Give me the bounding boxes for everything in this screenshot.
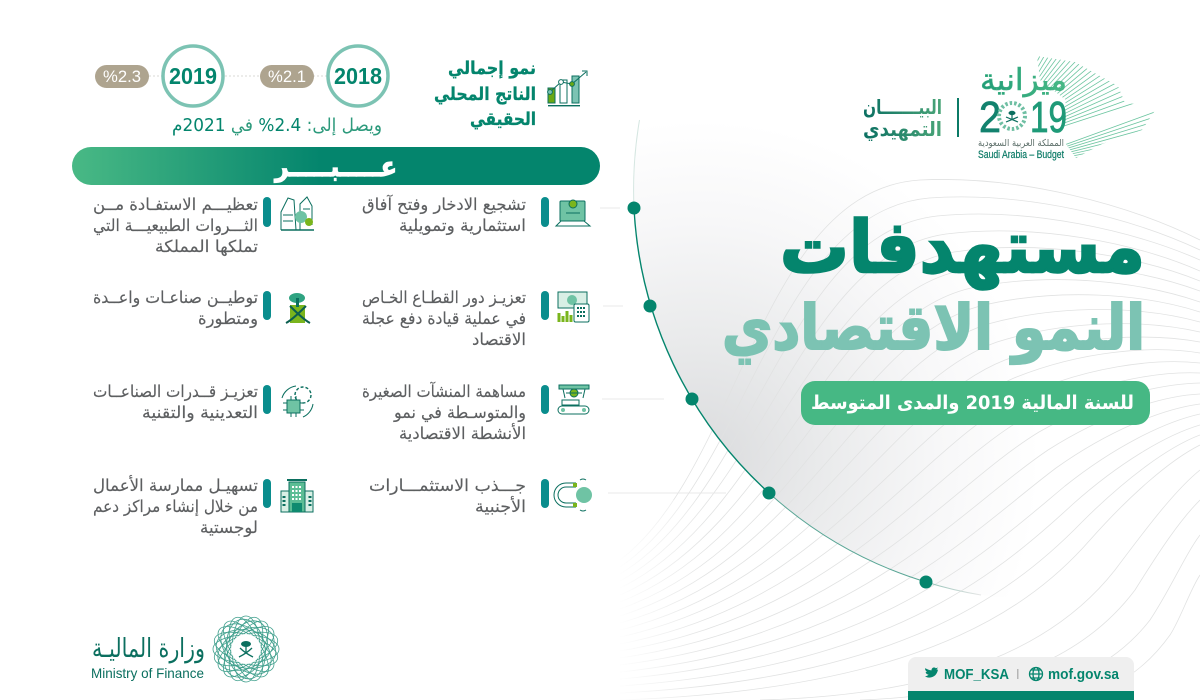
item: business environment: لوجستية (200, 518, 258, 538)
GDP growth heading: الناتج المحلي (434, 84, 536, 105)
emblem star (999, 103, 1025, 129)
timeline arc (628, 120, 981, 595)
banner: via: عـــــبـــــر (273, 152, 397, 183)
item: private sector: في عملية قيادة دفع عجلة (362, 309, 526, 329)
stat: 2019 (95, 46, 223, 106)
item text: تعظيـــم الاستفـادة مــن (93, 195, 258, 214)
icon: factory conveyor (558, 385, 589, 414)
icon: growth bar chart (548, 71, 587, 106)
item: private sector: الاقتصاد (472, 330, 526, 349)
banner: via (72, 147, 600, 185)
timeline dot 1 (628, 202, 640, 214)
budget english label: Saudi Arabia – Budget (978, 149, 1064, 161)
subtitle pill (801, 381, 1150, 425)
background disc (634, 0, 1200, 600)
item text: تعزيـز دور القطـاع الخـاص (362, 288, 526, 308)
item bar (541, 291, 549, 320)
ministry English name: Ministry of Finance (91, 665, 204, 681)
logo: budget 2019 (978, 56, 1154, 161)
item: business environment (93, 475, 313, 538)
GDP growth heading: الحقيقي (470, 109, 536, 130)
title line 2: النمو الاقتصادي (722, 291, 1145, 364)
preliminary statement heading: البيـــــــان (863, 95, 942, 119)
preliminary statement heading: التمهيدي (863, 117, 942, 142)
item bar (263, 479, 271, 508)
stat: 2018: 2018 (334, 63, 382, 89)
item: localise industries: ومتطورة (198, 309, 258, 329)
icon: twitter bird (925, 668, 938, 678)
item: natural resources (93, 195, 314, 257)
2021 forecast note: ويصل إلى: 2.4% في 2021م (172, 115, 382, 136)
icon: money and calculator (558, 292, 589, 322)
footer contact box (908, 657, 1134, 700)
item bar (541, 197, 549, 227)
GDP growth heading (434, 58, 536, 130)
item: natural resources: الثـــروات الطبيعيـــة التي (93, 216, 258, 236)
icon: gear and chip (282, 386, 313, 417)
ministry Arabic name: وزارة الماليـة (92, 634, 205, 664)
preliminary statement heading (863, 95, 942, 142)
item bar (263, 291, 271, 320)
title (722, 205, 1145, 364)
item text: تشجيع الادخار وفتح آفاق (362, 195, 526, 215)
twitter handle: MOF_KSA (944, 667, 1009, 683)
item bar (541, 385, 549, 414)
digit 2: 2 (979, 93, 1001, 142)
kingdom name: المملكة العربية السعودية (978, 138, 1064, 149)
item text: توطيــن صناعـات واعــدة (93, 288, 258, 308)
item: private sector (362, 288, 589, 349)
icon: palm and swords (286, 293, 310, 323)
item: savings (362, 195, 590, 236)
item: natural resources: تملكها المملكة (155, 237, 258, 257)
GDP growth heading: نمو إجمالي (448, 58, 536, 79)
map of Saudi Arabia stripes (1038, 56, 1154, 158)
pill: 2.3 percent (95, 65, 149, 88)
Ministry of Finance logo (91, 613, 282, 685)
digits 19: 19 (1030, 93, 1067, 142)
item: SMEs: الأنشطة الاقتصادية (399, 423, 526, 443)
item: localise industries (93, 288, 310, 329)
item bar (541, 479, 549, 508)
stat: 2018 (260, 46, 388, 106)
stat: 2018: %2.1 (268, 67, 306, 86)
stat: 2019: 2019 (169, 63, 217, 89)
icon: laptop savings (556, 200, 590, 226)
pill: 2.1 percent (260, 65, 314, 88)
item text: جـــذب الاستثمـــارات (369, 476, 526, 496)
website: mof.gov.sa (1048, 667, 1120, 683)
item: business environment: من خلال إنشاء مراكز دعم (93, 497, 258, 517)
item bar (263, 197, 271, 227)
budget word: ميزانية (980, 63, 1067, 98)
rosette emblem (210, 613, 282, 685)
item text: تعزيـز قــدرات الصناعــات (93, 382, 258, 402)
timeline dot 5 (920, 576, 932, 588)
title: مستهدفات (780, 205, 1145, 290)
item text: مساهمة المنشآت الصغيرة (362, 382, 526, 402)
timeline dot 3 (686, 392, 698, 406)
item: SMEs: والمتوسـطة في نمو (393, 403, 526, 423)
icon: city and trees (281, 197, 314, 230)
stat: 2019: %2.3 (103, 67, 141, 86)
icon: magnet (556, 479, 592, 511)
item: foreign investment: الأجنبية (475, 496, 526, 516)
item: savings: استثمارية وتمويلية (399, 216, 526, 236)
item: mining and technology: التعدينية والتقنية (142, 403, 258, 423)
item bar (263, 385, 271, 414)
item: foreign investment (369, 476, 592, 516)
item: mining and technology (93, 382, 313, 423)
subtitle pill: للسنة المالية 2019 والمدى المتوسط (811, 392, 1134, 414)
logo divider (957, 98, 959, 137)
timeline dot 2 (644, 300, 656, 312)
timeline dot 4 (762, 486, 776, 500)
item text: تسهيـل ممارسة الأعمال (93, 475, 258, 496)
item: SMEs (362, 382, 589, 443)
icon: office building (281, 479, 313, 512)
icon: globe (1030, 668, 1042, 680)
